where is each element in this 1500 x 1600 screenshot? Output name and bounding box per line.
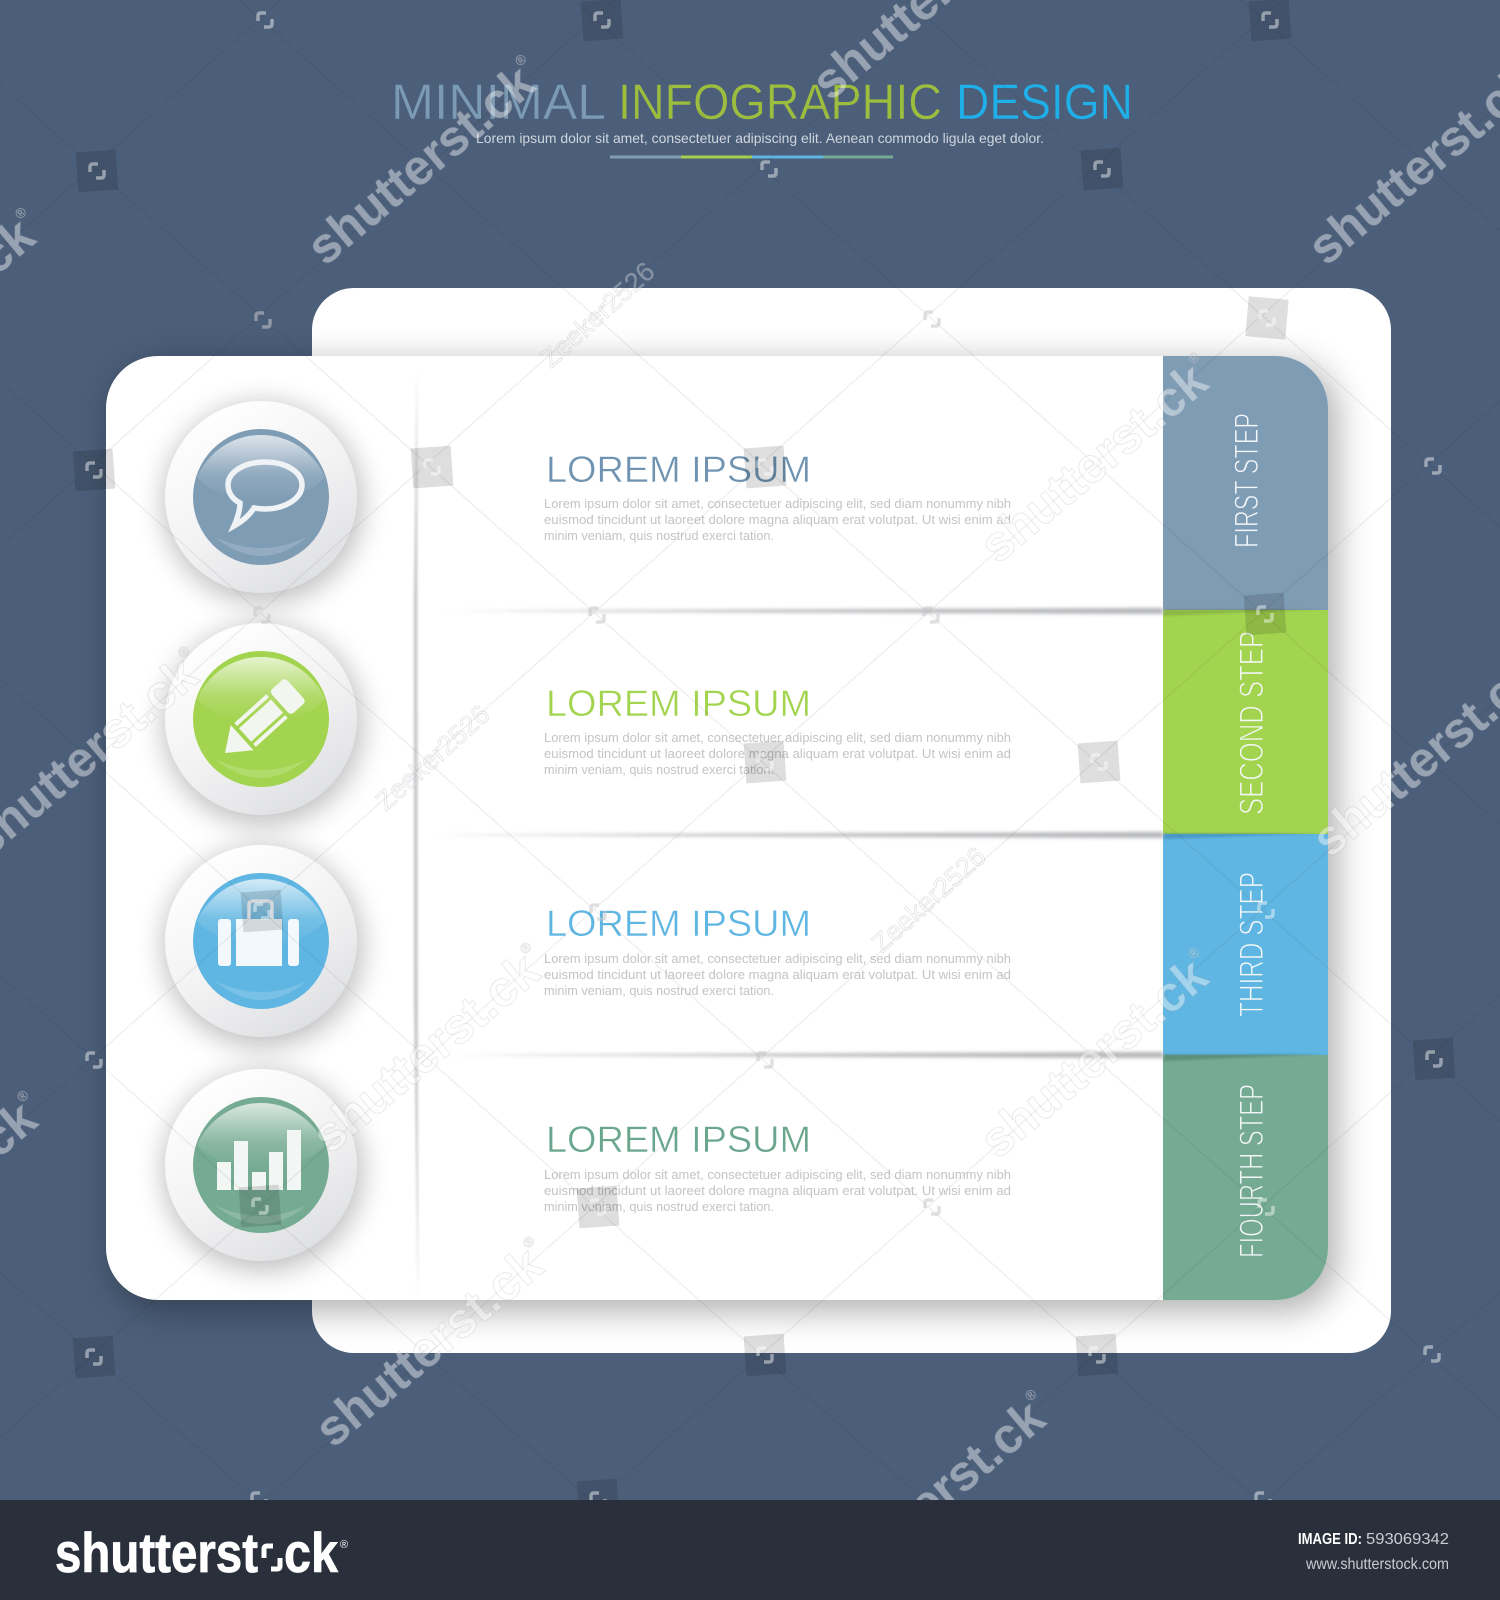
subtitle: Lorem ipsum dolor sit amet, consectetuer adipiscing elit. Aenean commodo ligula eget dolor.	[476, 130, 1044, 146]
tab: first step	[1163, 356, 1328, 610]
watermark text: ®	[517, 938, 535, 957]
title: DESIGN	[956, 74, 1133, 130]
watermark text: ®	[520, 1232, 538, 1251]
back card	[312, 288, 1391, 1353]
watermark text: shutterst.ck	[304, 1232, 557, 1457]
footer url: www.shutterstock.com	[1305, 1556, 1449, 1573]
row 1 text	[544, 449, 1011, 543]
watermark text: ®	[12, 203, 30, 222]
watermark text: Zeeker2526	[866, 841, 992, 958]
watermark text: ®	[1022, 1385, 1040, 1404]
icon: briefcase button	[164, 845, 362, 1046]
watermark text: Zeeker2526	[535, 256, 661, 373]
row 4 text: minim veniam, quis nostrud exerci tation.	[544, 1200, 774, 1214]
step label: third step: THIRD STEP	[1233, 872, 1271, 1017]
row 4 text: LOREM IPSUM	[546, 1119, 811, 1160]
row divider 2	[430, 832, 1163, 838]
row 3 text: LOREM IPSUM	[546, 903, 811, 944]
row 1 text: euismod tincidunt ut laoreet dolore magna aliquam erat volutpat. Ut wisi enim ad	[544, 513, 1011, 527]
title: INFOGRAPHIC	[618, 74, 942, 130]
row 3 text	[544, 903, 1011, 998]
watermark text: ®	[1185, 348, 1203, 367]
icon: pencil button	[164, 623, 362, 824]
front card shadow	[112, 362, 1338, 1312]
row 3 text: euismod tincidunt ut laoreet dolore magna aliquam erat volutpat. Ut wisi enim ad	[544, 968, 1011, 982]
watermark text: ®	[1185, 943, 1203, 962]
watermark text: ®	[512, 50, 530, 69]
row divider 1	[440, 608, 1163, 614]
watermark text: ®	[14, 1086, 32, 1105]
title	[391, 74, 1133, 130]
row 3 text: Lorem ipsum dolor sit amet, consectetuer adipiscing elit, sed diam nonummy nibh	[544, 952, 1011, 966]
row 2 text: minim veniam, quis nostrud exerci tation.	[544, 763, 774, 777]
panel: step tabs	[1163, 356, 1328, 1300]
image id: IMAGE ID:	[1298, 1531, 1362, 1548]
tab: third step	[1163, 833, 1328, 1055]
watermark text: shutterst.ck	[296, 50, 549, 275]
row 2 text: LOREM IPSUM	[546, 683, 811, 724]
row 4 text	[544, 1119, 1011, 1214]
vertical divider	[414, 370, 418, 1300]
title underline	[610, 156, 893, 158]
tab: second step	[1163, 609, 1328, 834]
watermark text: ®	[175, 642, 193, 661]
row 2 text	[544, 683, 1011, 777]
row 2 text: Lorem ipsum dolor sit amet, consectetuer adipiscing elit, sed diam nonummy nibh	[544, 731, 1011, 745]
watermark text: shutterst.ck	[969, 943, 1222, 1168]
icon: speech bubble button	[164, 401, 362, 602]
row 3 text: minim veniam, quis nostrud exerci tation.	[544, 984, 774, 998]
title: MINIMAL	[391, 74, 606, 130]
footer logo: ck	[284, 1521, 339, 1584]
footer logo: shutterst	[55, 1521, 258, 1584]
row 4 text: euismod tincidunt ut laoreet dolore magna aliquam erat volutpat. Ut wisi enim ad	[544, 1184, 1011, 1198]
row 1 text: Lorem ipsum dolor sit amet, consectetuer adipiscing elit, sed diam nonummy nibh	[544, 497, 1011, 511]
watermark text: shutterst.ck	[301, 938, 554, 1163]
icon: bar chart button	[164, 1069, 362, 1270]
row 4 text: Lorem ipsum dolor sit amet, consectetuer adipiscing elit, sed diam nonummy nibh	[544, 1168, 1011, 1182]
step label: second step: SECOND STEP	[1233, 631, 1271, 815]
footer bar	[0, 1500, 1500, 1600]
step label: fourth step: FIOURTH STEP	[1233, 1084, 1271, 1258]
row 1 text: minim veniam, quis nostrud exerci tation.	[544, 529, 774, 543]
footer logo: ®	[340, 1539, 348, 1551]
front card	[106, 356, 1328, 1300]
step label: first step: FIRST STEP	[1228, 413, 1266, 548]
tab: fourth step	[1163, 1054, 1328, 1300]
row 2 text: euismod tincidunt ut laoreet dolore magna aliquam erat volutpat. Ut wisi enim ad	[544, 747, 1011, 761]
row 1 text: LOREM IPSUM	[546, 449, 811, 490]
row divider 3	[450, 1052, 1163, 1058]
watermark text: Zeeker2526	[370, 699, 496, 816]
footer bar: 593069342	[1366, 1531, 1449, 1548]
watermark text: shutterst.ck	[969, 348, 1222, 573]
